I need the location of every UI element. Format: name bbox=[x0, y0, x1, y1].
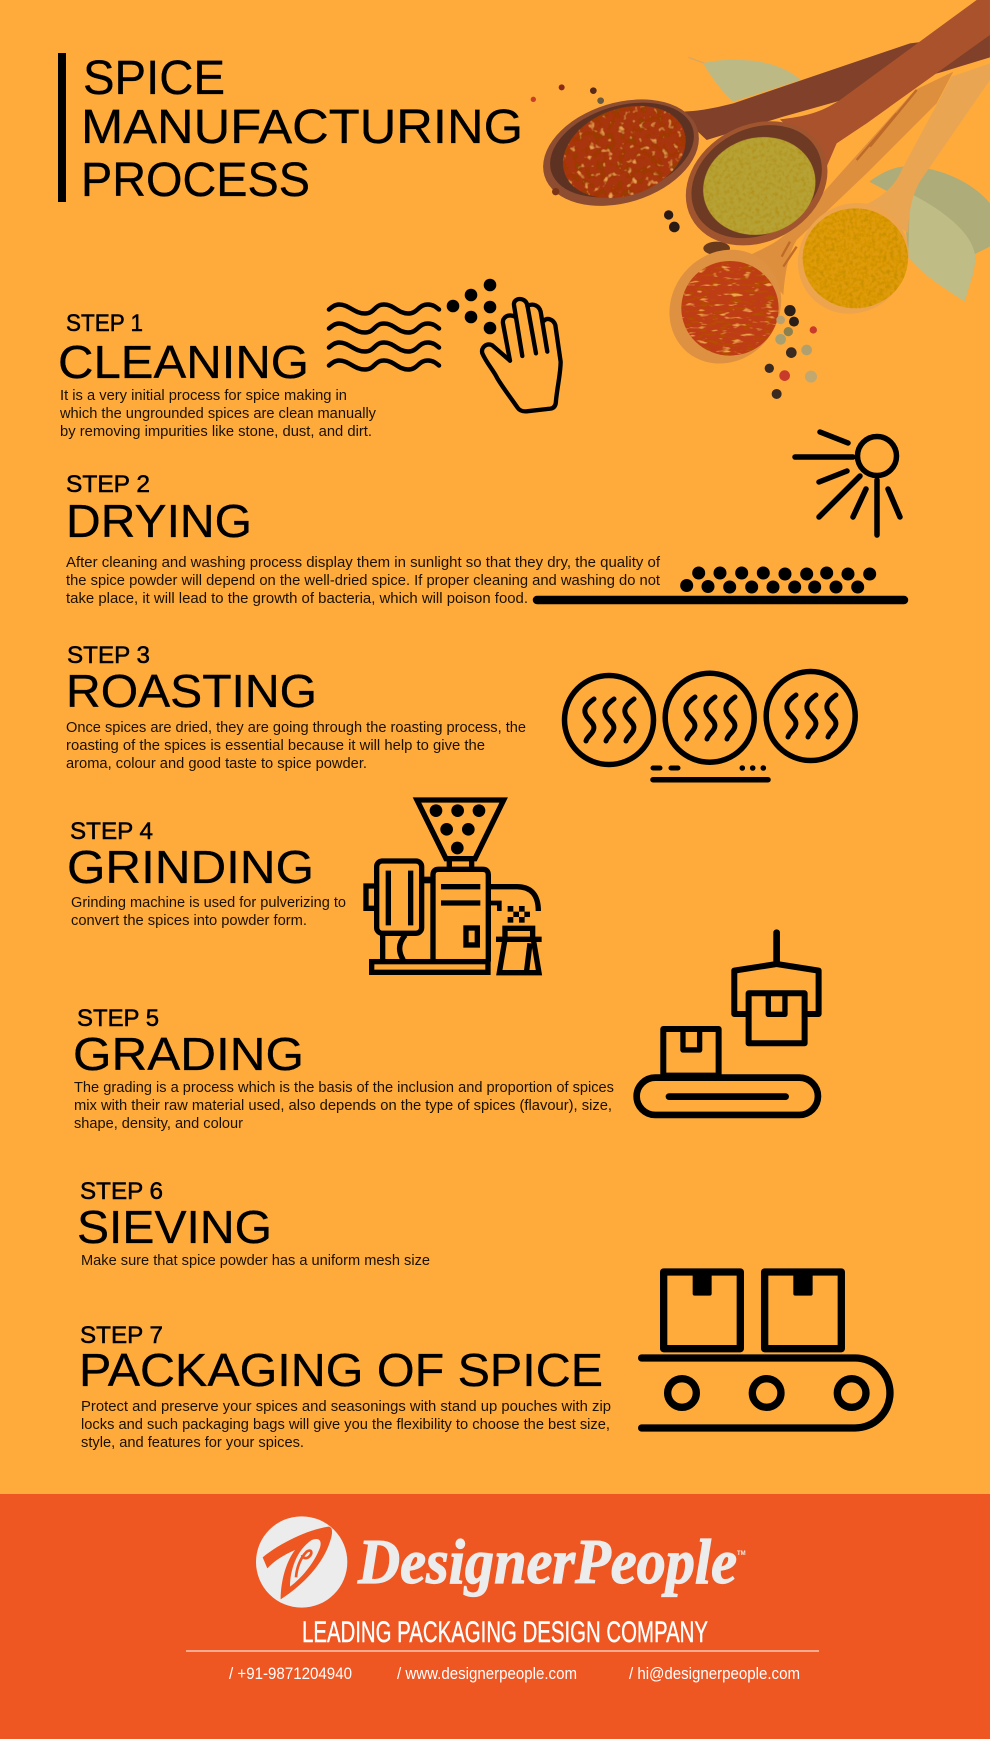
title text: MANUFACTURING bbox=[81, 101, 523, 154]
icon: conveyor with gripper and boxes bbox=[637, 933, 819, 1115]
step 4 heading: GRINDING bbox=[67, 841, 314, 893]
step 3 heading: ROASTING bbox=[66, 665, 317, 717]
step 7 label: STEP 7 bbox=[80, 1322, 163, 1349]
step 3 description: roasting of the spices is essential because it will help to give the bbox=[66, 737, 485, 754]
step 5 description: shape, density, and colour bbox=[74, 1115, 243, 1132]
title text: PROCESS bbox=[81, 154, 310, 207]
step 7 description: locks and such packaging bags will give you the flexibility to choose the best size, bbox=[81, 1416, 610, 1433]
step 5 description bbox=[74, 1079, 614, 1132]
step 1 heading: CLEANING bbox=[58, 336, 309, 388]
panel: step 5 grading bbox=[73, 933, 819, 1132]
step 3 description: aroma, colour and good taste to spice powder. bbox=[66, 755, 367, 772]
step 5 heading: GRADING bbox=[73, 1028, 304, 1080]
panel: step 2 drying bbox=[66, 432, 904, 607]
step 6 label: STEP 6 bbox=[80, 1178, 163, 1205]
title block bbox=[58, 52, 523, 207]
logo wordmark: DesignerPeople bbox=[357, 1526, 737, 1597]
panel: step 7 packaging bbox=[79, 1272, 890, 1451]
bay leaf top bbox=[688, 57, 801, 102]
step 3 label: STEP 3 bbox=[67, 642, 150, 669]
icon: water waves bbox=[329, 304, 439, 370]
contact: email: / hi@designerpeople.com bbox=[629, 1664, 800, 1683]
panel: step 1 cleaning bbox=[58, 279, 561, 440]
step 6 description: Make sure that spice powder has a uniform mesh size bbox=[81, 1252, 430, 1269]
scattered peppercorns bbox=[531, 84, 817, 399]
step 4 description bbox=[71, 894, 346, 929]
step 2 heading: DRYING bbox=[66, 495, 252, 547]
icon: grinding machine bbox=[366, 800, 542, 973]
step 7 heading: PACKAGING OF SPICE bbox=[79, 1344, 603, 1396]
photo: wooden spoons of spices bbox=[530, 0, 990, 399]
icon: packaging conveyor bbox=[642, 1272, 890, 1428]
step 7 description bbox=[81, 1398, 611, 1451]
spoon 2 bowl and yellow powder bbox=[664, 97, 849, 270]
icon: hand bbox=[482, 299, 561, 411]
step 1 description: It is a very initial process for spice making in bbox=[60, 387, 347, 404]
step 2 description: After cleaning and washing process display them in sunlight so that they dry, the quality of bbox=[66, 554, 661, 571]
spoon 4 bowl shadow bbox=[703, 242, 730, 255]
step 2 label: STEP 2 bbox=[66, 471, 150, 498]
title text bbox=[81, 52, 523, 207]
icon: spices drying on surface bbox=[537, 566, 904, 600]
spoon 2 handle, dark wood bbox=[780, 0, 990, 167]
panel: step 4 grinding bbox=[67, 800, 542, 973]
footer band bbox=[0, 1494, 990, 1739]
step 2 description bbox=[66, 554, 661, 607]
spoon 1 bowl and chili flakes bbox=[530, 81, 712, 224]
title accent bar bbox=[58, 53, 66, 202]
spoon 3 bowl and turmeric bbox=[775, 180, 932, 337]
step 5 description: mix with their raw material used, also depends on the type of spices (flavour), size, bbox=[74, 1097, 612, 1114]
step 4 description: convert the spices into powder form. bbox=[71, 912, 307, 929]
step 7 description: Protect and preserve your spices and seasonings with stand up pouches with zip bbox=[81, 1398, 611, 1415]
tagline: LEADING PACKAGING DESIGN COMPANY bbox=[302, 1616, 708, 1649]
step 5 description: The grading is a process which is the basis of the inclusion and proportion of spices bbox=[74, 1079, 614, 1096]
logo mark bbox=[256, 1516, 347, 1608]
step 1 description bbox=[59, 387, 376, 440]
trademark: TM bbox=[737, 1551, 746, 1557]
spoon 4 handle, light wood bbox=[750, 72, 953, 295]
contact: phone: / +91-9871204940 bbox=[229, 1664, 352, 1683]
spoon 1 handle, dark wood bbox=[677, 33, 990, 140]
panel: step 3 roasting bbox=[66, 642, 855, 780]
bay leaf right bbox=[869, 166, 990, 302]
step 3 description bbox=[66, 719, 526, 772]
step 2 description: the spice powder will depend on the well-dried spice. If proper cleaning and washing do not bbox=[66, 572, 661, 589]
icon: spice dots bbox=[447, 279, 496, 334]
step 4 description: Grinding machine is used for pulverizing to bbox=[71, 894, 346, 911]
step 2 description: take place, it will lead to the growth of bacteria, which will poison food. bbox=[66, 590, 528, 607]
title text: SPICE bbox=[83, 52, 225, 105]
panel: step 6 sieving bbox=[77, 1178, 430, 1269]
spoon 4 bowl and saffron bbox=[646, 227, 804, 386]
step 5 label: STEP 5 bbox=[77, 1005, 159, 1032]
step 6 heading: SIEVING bbox=[77, 1201, 272, 1253]
icon: roasting pans with heat bbox=[564, 672, 855, 780]
step 7 description: style, and features for your spices. bbox=[81, 1434, 304, 1451]
icon: sun bbox=[795, 432, 900, 535]
contact: website: / www.designerpeople.com bbox=[397, 1664, 577, 1683]
step 1 label: STEP 1 bbox=[66, 310, 143, 337]
step 1 description: by removing impurities like stone, dust, and dirt. bbox=[60, 423, 372, 440]
step 1 description: which the ungrounded spices are clean manually bbox=[59, 405, 376, 422]
spoon 3 handle, light wood bbox=[867, 63, 990, 233]
step 3 description: Once spices are dried, they are going through the roasting process, the bbox=[66, 719, 526, 736]
step 4 label: STEP 4 bbox=[70, 818, 153, 845]
